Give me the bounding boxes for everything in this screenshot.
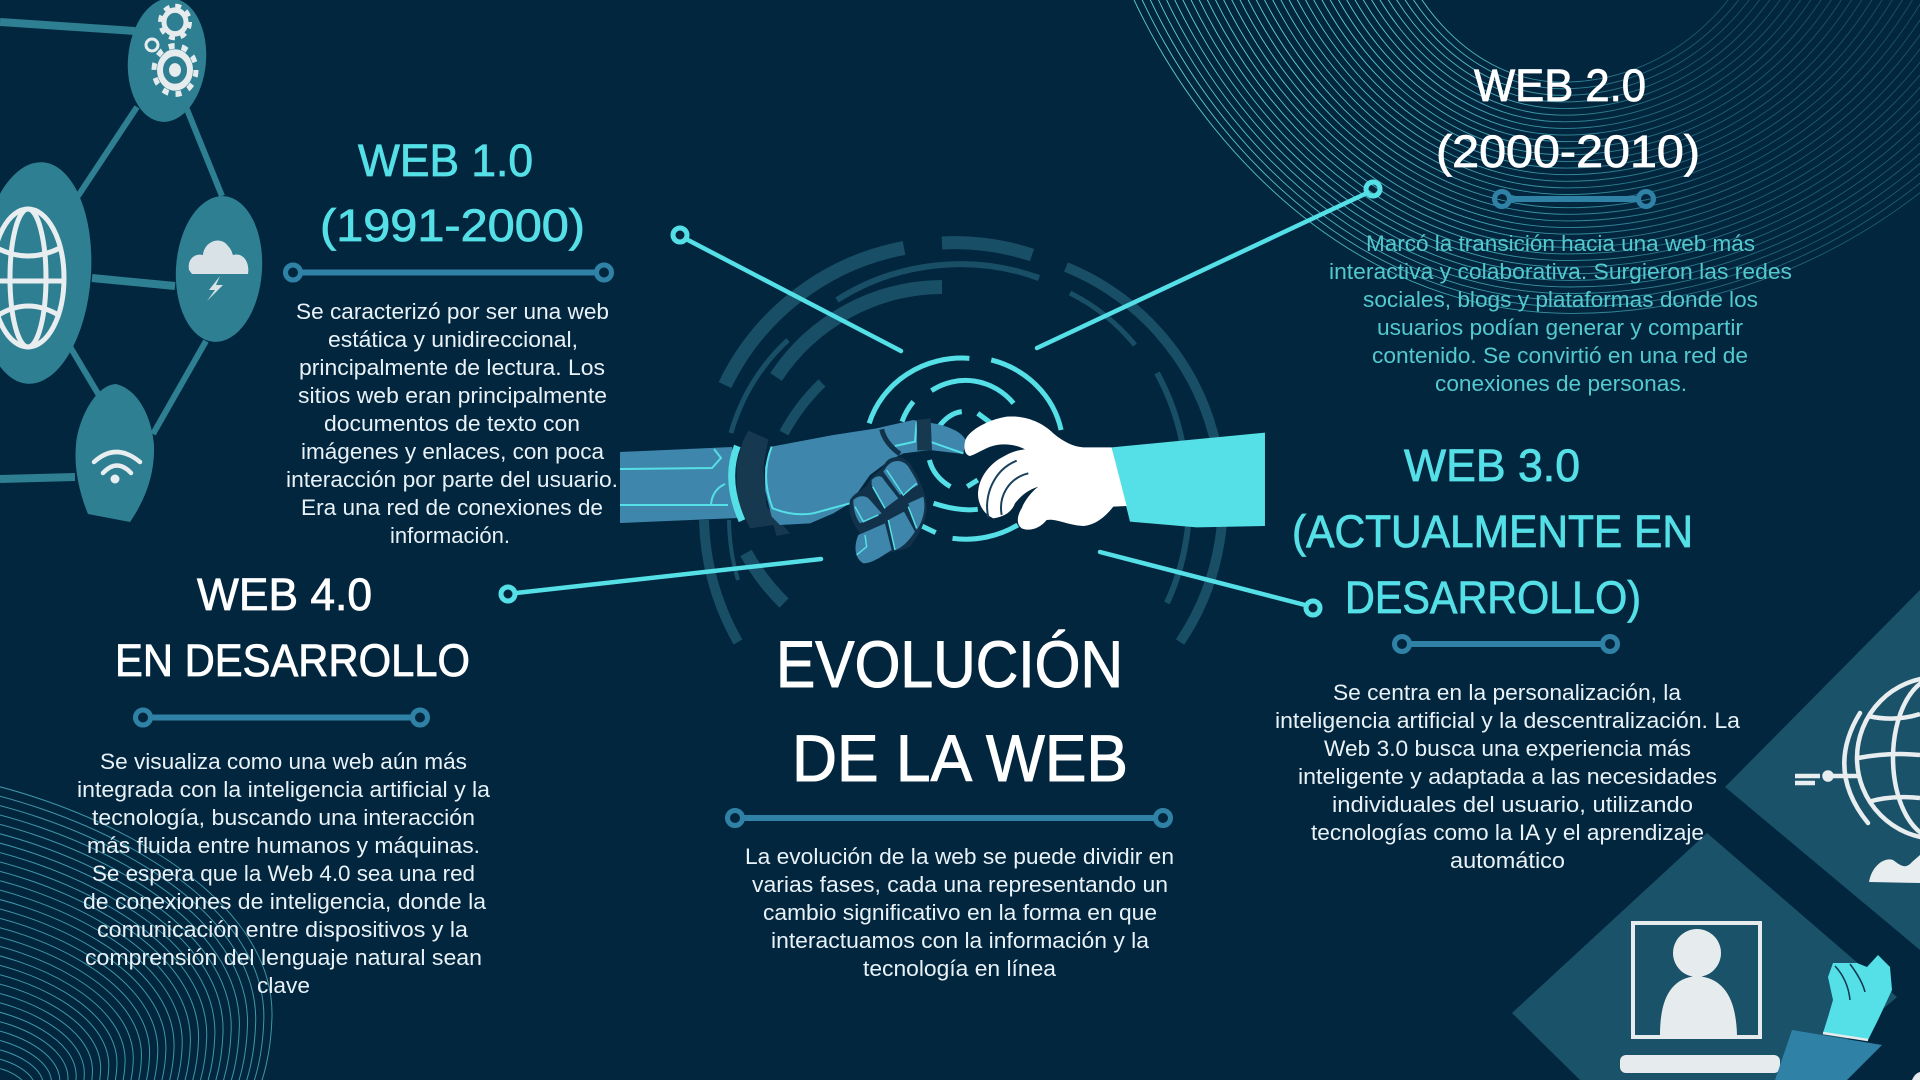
body text: sitios web eran principalmente [298, 383, 607, 408]
heading [1292, 440, 1693, 623]
decorative circular arcs behind the hands [704, 243, 1223, 642]
title [776, 627, 1128, 795]
robot palm and pointing finger [765, 420, 966, 525]
heading: WEB 1.0 [358, 135, 533, 186]
divider [728, 810, 1170, 826]
robot forearm [620, 447, 738, 523]
body text [286, 299, 618, 548]
body text: usuarios podían generar y compartir [1377, 315, 1743, 340]
cuff band [732, 446, 742, 521]
heading: WEB 4.0 [197, 569, 372, 620]
body text: contenido. Se convirtió en una red de [1372, 343, 1748, 368]
heading: WEB 2.0 [1474, 60, 1646, 111]
section: web 2.0 [1329, 60, 1792, 396]
body text [1329, 231, 1792, 396]
body text: información. [390, 523, 510, 548]
body text: Se visualiza como una web aún más [100, 749, 467, 774]
robot wrist [737, 431, 790, 536]
section: web 4.0 [77, 569, 491, 998]
body text: Web 3.0 busca una experiencia más [1324, 736, 1691, 761]
divider [136, 710, 428, 725]
illustration: robot hand [620, 418, 966, 563]
intro text: varias fases, cada una representando un [752, 872, 1168, 897]
intro text: interactuamos con la información y la [771, 928, 1150, 953]
heading [1436, 60, 1700, 177]
body text: de conexiones de inteligencia, donde la [83, 889, 487, 914]
heading: (2000-2010) [1436, 126, 1700, 177]
section: web 3.0 [1275, 440, 1741, 873]
body text: sociales, blogs y plataformas donde los [1363, 287, 1758, 312]
body text: conexiones de personas. [1435, 371, 1687, 396]
body text: estática y unidireccional, [328, 327, 578, 352]
human hand shape [964, 416, 1127, 530]
heading: DESARROLLO) [1345, 572, 1641, 623]
body text: imágenes y enlaces, con poca [301, 439, 605, 464]
icon: globe with signal [1795, 677, 1920, 883]
robot curled fingers [849, 457, 927, 562]
body text: Era una red de conexiones de [301, 495, 603, 520]
section: web 1.0 [286, 135, 618, 548]
body text: interacción por parte del usuario. [286, 467, 618, 492]
body text: comprensión del lenguaje natural sean [85, 945, 482, 970]
heading [115, 569, 470, 686]
body text [77, 749, 491, 998]
body text [1275, 680, 1741, 873]
body text: interactiva y colaborativa. Surgieron las redes [1329, 259, 1792, 284]
body text: más fluida entre humanos y máquinas. [87, 833, 480, 858]
heading [320, 135, 585, 251]
heading: (1991-2000) [320, 200, 585, 251]
concentric cyan rings [869, 358, 1061, 539]
icon: wifi node [76, 384, 154, 522]
heading: (ACTUALMENTE EN [1292, 506, 1693, 557]
intro text: La evolución de la web se puede dividir en [745, 844, 1174, 869]
decorative right diamonds [1725, 590, 1920, 950]
body text: principalmente de lectura. Los [299, 355, 605, 380]
icon: globe node [0, 158, 99, 388]
body text: automático [1450, 848, 1565, 873]
intro text: cambio significativo en la forma en que [763, 900, 1157, 925]
body text: tecnologías como la IA y el aprendizaje [1311, 820, 1704, 845]
body text: integrada con la inteligencia artificial y la [77, 777, 491, 802]
divider [286, 265, 612, 280]
body text: Se espera que la Web 4.0 sea una red [92, 861, 475, 886]
body text: comunicación entre dispositivos y la [97, 917, 469, 942]
intro text [745, 844, 1174, 981]
human sleeve [1112, 433, 1265, 527]
heading: EN DESARROLLO [115, 635, 470, 686]
connector lines to each section [501, 182, 1380, 615]
title: EVOLUCIÓN [776, 627, 1123, 701]
body text: inteligencia artificial y la descentralización. La [1275, 708, 1741, 733]
title: DE LA WEB [792, 721, 1128, 795]
body text: Se caracterizó por ser una web [296, 299, 609, 324]
intro text: tecnología en línea [863, 956, 1057, 981]
illustration: human hand [964, 416, 1265, 530]
body text: documentos de texto con [324, 411, 580, 436]
icon: cloud node [171, 193, 267, 345]
body text: clave [257, 973, 310, 998]
divider [1394, 636, 1618, 652]
body text: Se centra en la personalización, la [1333, 680, 1682, 705]
body text: Marcó la transición hacia una web más [1366, 231, 1755, 256]
heading: WEB 3.0 [1404, 440, 1580, 491]
icon: gears node [123, 0, 211, 125]
body text: tecnología, buscando una interacción [92, 805, 475, 830]
network illustration: connected icons [0, 0, 267, 522]
icon: user profile on monitor with hand [1620, 923, 1920, 1080]
body text: individuales del usuario, utilizando [1332, 792, 1693, 817]
main title block [728, 627, 1174, 981]
body text: inteligente y adaptada a las necesidades [1298, 764, 1717, 789]
divider [1494, 192, 1654, 206]
